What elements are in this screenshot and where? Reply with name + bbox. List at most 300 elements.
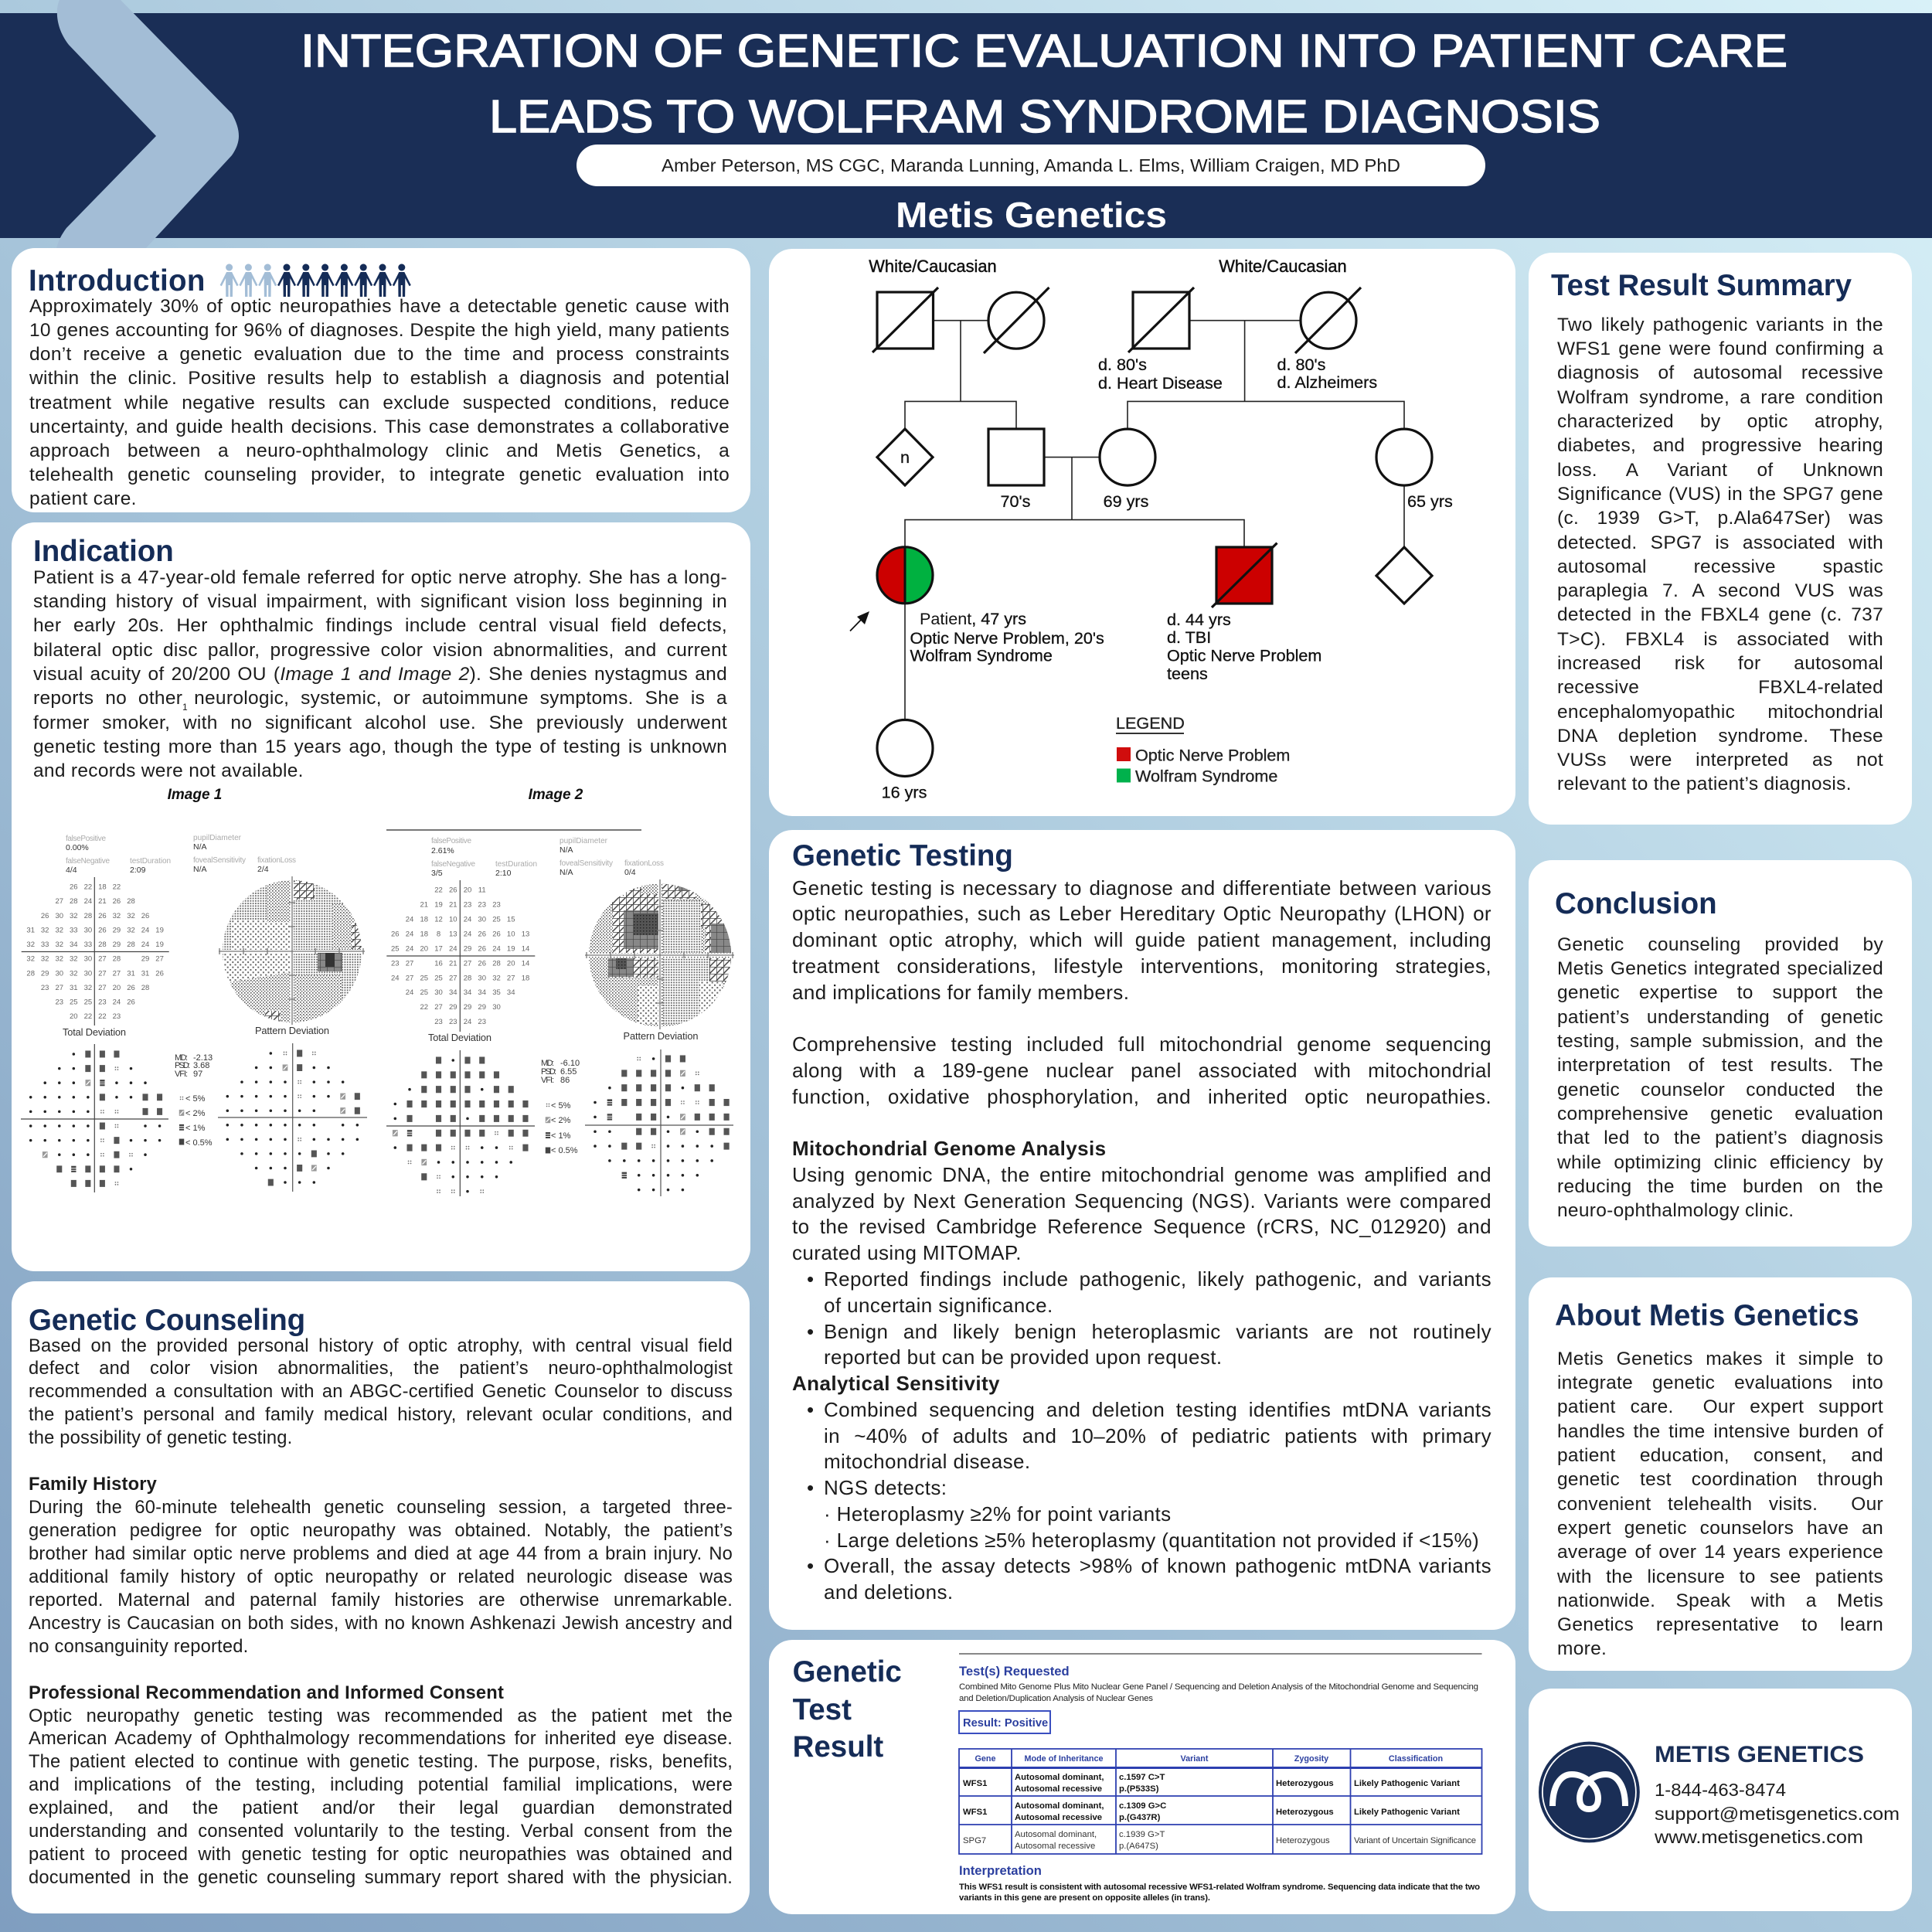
text: genetic testing body: · Heteroplasmy ≥2% for point variants xyxy=(824,1502,1172,1526)
text: test result summary body xyxy=(1557,315,1883,794)
result badge: Result: Positive xyxy=(963,1717,1048,1730)
text: genetic testing body: function, oxidative phosphorylation, and inherited optic neuropathies. xyxy=(792,1085,1492,1108)
text: genetic testing body: Mitochondrial Genome Analysis xyxy=(792,1137,1107,1160)
results table: p.(G437R) xyxy=(1119,1813,1161,1822)
image 2 test parameters: falsePositive xyxy=(431,837,471,845)
image 2 global indices and legend xyxy=(541,1059,580,1155)
image 2 sensitivity numbers: 20 xyxy=(507,959,515,968)
caption: image 2 total deviation: Total Deviation xyxy=(428,1032,492,1043)
results table: Likely Pathogenic Variant xyxy=(1354,1808,1460,1817)
image 2 sensitivity numbers: 8 xyxy=(437,930,440,938)
text: genetic testing body: · Large deletions ≥5% heteroplasmy (quantitation not provided if <15%) xyxy=(824,1529,1479,1552)
image 2 sensitivity numbers: 23 xyxy=(478,1018,486,1026)
image 2 sensitivity numbers: 18 xyxy=(420,930,428,938)
image 2 sensitivity numbers: 23 xyxy=(492,901,501,909)
image 1 sensitivity numbers: 29 xyxy=(113,926,121,934)
image 1 global indices and legend: < 0.5% xyxy=(185,1138,213,1148)
interpretation xyxy=(959,1863,1480,1903)
image 1 global indices and legend: VFI: xyxy=(175,1070,188,1079)
image 2 sensitivity numbers: 24 xyxy=(464,930,471,938)
image 1 sensitivity numbers: 32 xyxy=(127,926,135,934)
caption: image 1 total deviation: Total Deviation xyxy=(63,1026,126,1038)
patient labels: Wolfram Syndrome xyxy=(910,646,1053,665)
text: indication body xyxy=(33,567,727,781)
heading: conclusion: Conclusion xyxy=(1555,887,1717,920)
text: genetic testing body: of uncertain significance. xyxy=(824,1294,1053,1317)
image 2 sensitivity numbers: 32 xyxy=(492,974,501,982)
image 2 sensitivity numbers: 16 xyxy=(434,959,443,968)
image 1 sensitivity numbers: 22 xyxy=(84,883,92,892)
image 1 sensitivity numbers: 26 xyxy=(113,897,121,906)
image 2 sensitivity numbers: 24 xyxy=(492,944,501,953)
ancestry labels xyxy=(869,257,1347,276)
image 2 sensitivity numbers: 29 xyxy=(449,1003,457,1012)
panel: genetic testing xyxy=(769,830,1515,1630)
image 2 sensitivity numbers: 30 xyxy=(478,915,486,923)
image 1 test parameters: 2:09 xyxy=(130,866,146,875)
text: test result summary body: encephalomyopathic mitochondrial xyxy=(1557,702,1883,723)
results table: Autosomal recessive xyxy=(1015,1784,1102,1794)
image 1 sensitivity numbers: 30 xyxy=(56,969,63,978)
results table: Autosomal recessive xyxy=(1015,1842,1095,1851)
text: about body: Metis Genetics makes it simple to xyxy=(1557,1349,1883,1369)
text: test result summary body: relevant to the patient’s diagnosis. xyxy=(1557,774,1852,794)
text: test result summary body: detected. SPG7 is associated with xyxy=(1557,532,1883,553)
image 1 global indices and legend: PSD: xyxy=(175,1061,190,1070)
text: genetic counseling body: the patient’s personal and family medical history, relevant ocular conditions, and xyxy=(29,1405,733,1425)
image 2 sensitivity numbers: 17 xyxy=(434,944,443,953)
heading: genetic test result: Test xyxy=(793,1693,852,1726)
image 2 sensitivity numbers: 25 xyxy=(434,974,443,982)
text: introduction body: uncertainty, and guide health decisions. This case demonstrates a collaborative xyxy=(29,417,730,437)
image 1 global indices and legend: MD: xyxy=(175,1053,188,1063)
text: genetic testing body: mitochondrial disease. xyxy=(824,1450,1031,1473)
maternal grandparent notes: d. Alzheimers xyxy=(1277,372,1377,392)
text: genetic counseling body: understanding and consented voluntarily to the testing. Verbal consent from the xyxy=(29,1821,733,1842)
results table: c.1597 C>T xyxy=(1119,1773,1165,1782)
image 1 test parameters: N/A xyxy=(193,865,207,874)
contact details xyxy=(1654,1780,1900,1847)
second generation symbols xyxy=(877,429,1432,485)
text: genetic counseling body: no consanguinity reported. xyxy=(29,1637,248,1657)
image 1 sensitivity numbers: 32 xyxy=(70,955,78,964)
report top rule xyxy=(959,1653,1482,1655)
text: introduction body: approach between a neuro-ophthalmology clinic and Metis Genetics, a xyxy=(29,440,730,461)
image 2 test parameters: fixationLoss xyxy=(624,859,664,868)
image 1 sensitivity numbers: 26 xyxy=(98,926,107,934)
tests requested: and Deletion/Duplication Analysis of Nuclear Genes xyxy=(959,1694,1153,1703)
text: test result summary body: Two likely pathogenic variants in the xyxy=(1557,315,1883,335)
image 1 sensitivity numbers: 32 xyxy=(70,912,78,920)
text: genetic testing body: treatment considerations, lifestyle interventions, monitoring strategies, xyxy=(792,954,1492,978)
image 1 sensitivity numbers: 28 xyxy=(98,940,107,949)
text: introduction body: don’t receive a genetic evaluation due to the time and process constraints xyxy=(29,344,730,365)
text: conclusion body: interpretation of test results. The xyxy=(1557,1055,1883,1076)
image 2 sensitivity numbers: 30 xyxy=(478,974,486,982)
image 2 sensitivity numbers: 10 xyxy=(507,930,515,938)
interpretation: Interpretation xyxy=(959,1863,1042,1878)
title xyxy=(301,26,1787,142)
contact details: 1-844-463-8474 xyxy=(1655,1780,1786,1800)
image 1 sensitivity numbers: 28 xyxy=(113,955,121,964)
image 2 sensitivity numbers: 24 xyxy=(464,915,471,923)
text: genetic counseling body: Family History xyxy=(29,1475,157,1495)
heading: genetic test result: Result xyxy=(793,1730,883,1764)
image 1 sensitivity numbers: 32 xyxy=(41,955,49,964)
image 2 test parameters: 2.61% xyxy=(431,846,454,855)
image 1 sensitivity numbers: 32 xyxy=(56,955,63,964)
heading: genetic test result: Genetic xyxy=(793,1655,902,1689)
image 1 sensitivity numbers: 23 xyxy=(98,998,107,1006)
chart: family pedigree xyxy=(849,257,1453,802)
image 2 sensitivity numbers: 24 xyxy=(406,930,413,938)
text: genetic counseling body: Optic neuropathy genetic testing was recommended as the patient met the xyxy=(29,1706,733,1726)
authors pill xyxy=(577,145,1485,186)
patient labels: Optic Nerve Problem, 20's xyxy=(910,628,1104,648)
text: test result summary body: characterized by optic atrophy, xyxy=(1557,411,1883,432)
image 1 sensitivity numbers: 31 xyxy=(70,984,78,992)
interpretation: This WFS1 result is consistent with autosomal recessive WFS1-related Wolfram syndrome. Sequencing data indicate that the two xyxy=(959,1883,1480,1892)
image 1 global indices and legend: < 1% xyxy=(185,1124,206,1133)
text: genetic testing body: in ~40% of adults and 10–20% of pediatric patients with primary xyxy=(824,1424,1492,1447)
image 1 global indices and legend: < 5% xyxy=(185,1094,206,1104)
image 1 sensitivity numbers: 24 xyxy=(141,940,149,949)
image 2 sensitivity numbers: 15 xyxy=(507,915,515,923)
text: genetic counseling body: reported. Maternal and paternal family histories are otherwise unremarkable. xyxy=(29,1590,733,1611)
organization name: Metis Genetics xyxy=(896,195,1167,235)
text: genetic testing body: to the revised Cambridge Reference Sequence (rCRS, NC_012920) and xyxy=(792,1215,1492,1238)
image 2 sensitivity numbers: 26 xyxy=(478,959,486,968)
image 2 test parameters: fovealSensitivity xyxy=(560,859,613,868)
image 1 sensitivity numbers: 26 xyxy=(127,998,135,1006)
image 2 sensitivity numbers: 29 xyxy=(478,1003,486,1012)
text: test result summary body: detected in the FBXL4 gene (c. 737 xyxy=(1557,604,1883,625)
second generation labels xyxy=(900,447,1453,511)
image 2 sensitivity numbers: 29 xyxy=(464,944,471,953)
image 1 sensitivity numbers: 32 xyxy=(26,955,35,964)
image 1 global indices and legend xyxy=(175,1053,213,1148)
results table: Variant of Uncertain Significance xyxy=(1354,1836,1476,1845)
maternal grandparent notes xyxy=(1098,355,1377,393)
panel: genetic counseling xyxy=(12,1281,750,1913)
image 1 sensitivity numbers: 26 xyxy=(41,912,49,920)
text: indication body: her early 20s. Her ophthalmic findings include central visual field defects, xyxy=(33,615,727,636)
text: indication body: genetic testing more than 15 years ago, though the type of testing is unknown xyxy=(33,736,727,757)
legend xyxy=(1116,713,1290,786)
tests requested: Combined Mito Genome Plus Mito Nuclear Gene Panel / Sequencing and Deletion Analysis of the Mitochondrial Genome and Sequencing xyxy=(959,1682,1478,1692)
image 2 sensitivity numbers: 23 xyxy=(434,1018,443,1026)
panel: indication xyxy=(12,522,750,1271)
text: about body: more. xyxy=(1557,1638,1607,1659)
patient symbol xyxy=(877,547,933,604)
title: LEADS TO WOLFRAM SYNDROME DIAGNOSIS xyxy=(489,91,1600,142)
image 1 sensitivity numbers: 32 xyxy=(41,926,49,934)
second generation labels: 65 yrs xyxy=(1407,492,1453,511)
image 1 sensitivity numbers: 30 xyxy=(84,969,92,978)
pedigree connecting lines xyxy=(905,321,1404,719)
image 2 sensitivity numbers: 21 xyxy=(449,901,457,909)
image 1 sensitivity numbers: 30 xyxy=(56,912,63,920)
text: genetic testing body: Reported findings include pathogenic, likely pathogenic, and variants xyxy=(824,1267,1492,1291)
image 2 global indices and legend: < 2% xyxy=(551,1116,571,1125)
image 2 global indices and legend: < 1% xyxy=(551,1131,571,1141)
image 2 sensitivity numbers: 34 xyxy=(478,988,486,997)
footnote mark: 1 xyxy=(182,702,188,713)
image 2 total deviation probability plot xyxy=(386,1050,535,1196)
brother labels: d. 44 yrs xyxy=(1167,610,1231,629)
image 1 sensitivity numbers: 22 xyxy=(84,1012,92,1021)
heading: about metis genetics: About Metis Genetics xyxy=(1555,1298,1859,1332)
contact name: METIS GENETICS xyxy=(1655,1742,1864,1767)
second generation labels: n xyxy=(900,447,910,467)
panel: genetic test result xyxy=(769,1640,1515,1914)
maternal grandparent notes: d. Heart Disease xyxy=(1098,373,1223,393)
results table: p.(P533S) xyxy=(1119,1784,1159,1794)
brother labels: Optic Nerve Problem xyxy=(1167,646,1321,665)
image 1 sensitivity numbers: 32 xyxy=(70,969,78,978)
text: genetic testing body: • xyxy=(807,1267,815,1291)
legend: LEGEND xyxy=(1116,713,1185,733)
text: genetic testing body: dominant optic atrophy, which will guide patient management, including xyxy=(792,928,1492,951)
text: about body: genetic test coordination through xyxy=(1557,1469,1883,1490)
text: indication body: visual acuity of 20/200 OU (Image 1 and Image 2). She denies nystagmus and xyxy=(33,664,727,685)
maternal grandparent notes: d. 80's xyxy=(1277,355,1326,374)
text: conclusion body: testing, sample submission, and the xyxy=(1557,1031,1883,1052)
paternal grandparents xyxy=(872,287,1049,353)
image 2 sensitivity numbers: 21 xyxy=(449,959,457,968)
panel: test result summary xyxy=(1529,253,1912,825)
text: genetic testing body: Overall, the assay detects >98% of known pathogenic mtDNA variants xyxy=(824,1554,1492,1577)
panel: conclusion xyxy=(1529,860,1912,1247)
image 2 sensitivity numbers: 27 xyxy=(406,959,413,968)
image 2 pattern deviation grayscale disc xyxy=(585,879,734,1029)
image 2 sensitivity numbers: 21 xyxy=(420,901,428,909)
heading: introduction: Introduction xyxy=(29,264,206,297)
text: about body: with the licensure to see patients xyxy=(1557,1566,1883,1587)
image 2 sensitivity numbers: 25 xyxy=(420,988,428,997)
text: about body: convenient telehealth visits. Our xyxy=(1557,1494,1883,1515)
text: about body: average of over 14 years experience xyxy=(1557,1542,1883,1563)
text: genetic testing body: Analytical Sensitivity xyxy=(792,1372,1000,1395)
image 1 sensitivity numbers: 31 xyxy=(127,969,135,978)
results table: Heterozygous xyxy=(1276,1808,1334,1817)
text: about body: patient education, consent, and xyxy=(1557,1445,1883,1466)
image 2 top rule xyxy=(386,829,641,831)
heading: indication: Indication xyxy=(33,535,174,567)
text: genetic counseling body: documented in the genetic counseling summary report shared with the physician. xyxy=(29,1868,733,1888)
image 2 sensitivity numbers: 24 xyxy=(449,944,457,953)
results table: Zygosity xyxy=(1294,1754,1328,1764)
panel: introduction xyxy=(12,248,750,512)
image 2 sensitivity numbers: 27 xyxy=(507,974,515,982)
image 1 test parameters: 4/4 xyxy=(66,866,77,875)
image 1 sensitivity numbers: 30 xyxy=(84,955,92,964)
text: about body: Genetics representative to learn xyxy=(1557,1614,1883,1635)
icon: row of ten people xyxy=(219,264,411,297)
text: conclusion body: reducing the time burden on the xyxy=(1557,1176,1883,1197)
image 2 sensitivity numbers: 34 xyxy=(449,988,457,997)
image 2 sensitivity numbers: 20 xyxy=(420,944,428,953)
text: genetic testing body: • xyxy=(807,1320,815,1343)
heading: genetic testing: Genetic Testing xyxy=(792,839,1013,872)
brother labels: teens xyxy=(1167,664,1208,683)
text: test result summary body: diabetes, and progressive hearing xyxy=(1557,435,1883,456)
text: genetic testing body xyxy=(792,876,1492,1604)
text: indication body: bilateral optic disc pallor, progressive color vision abnormalities, and current xyxy=(33,640,727,661)
text: genetic counseling body: During the 60-minute telehealth genetic counseling session, a targeted three- xyxy=(29,1498,733,1518)
image 2 sensitivity numbers: 27 xyxy=(434,1003,443,1012)
text: genetic testing body: along with a 189-gene nuclear panel associated with mitochondrial xyxy=(792,1059,1492,1082)
image 1 sensitivity numbers: 29 xyxy=(141,955,149,964)
heading: genetic test result xyxy=(793,1655,902,1764)
results table: Heterozygous xyxy=(1276,1836,1330,1845)
text: genetic testing body: reported but can be provided upon request. xyxy=(824,1345,1222,1369)
image 1 sensitivity numbers: 26 xyxy=(155,969,164,978)
interpretation: variants in this gene are present on opposite alleles (in trans). xyxy=(959,1893,1210,1903)
title: INTEGRATION OF GENETIC EVALUATION INTO PATIENT CARE xyxy=(301,26,1787,77)
text: introduction body: Approximately 30% of optic neuropathies have a detectable genetic cause with xyxy=(29,296,730,317)
image 1 sensitivity numbers: 19 xyxy=(155,926,164,934)
image 2 sensitivity numbers: 35 xyxy=(492,988,501,997)
tests requested: Test(s) Requested xyxy=(959,1664,1070,1679)
image 2 sensitivity numbers: 24 xyxy=(406,915,413,923)
image 1 test parameters: fixationLoss xyxy=(257,856,296,865)
image 1 global indices and legend: 3.68 xyxy=(193,1061,209,1070)
image 2 sensitivity numbers: 24 xyxy=(391,974,400,982)
text: indication body: reports no other neurologic, systemic, or autoimmune symptoms. She is a xyxy=(33,688,727,709)
image 2 sensitivity numbers: 18 xyxy=(420,915,428,923)
text: genetic testing body: and implications for family members. xyxy=(792,981,1129,1004)
header banner xyxy=(0,0,1932,248)
image 1 sensitivity numbers: 32 xyxy=(56,940,63,949)
image 2 test parameters xyxy=(431,837,664,878)
image 2 sensitivity numbers: 26 xyxy=(478,930,486,938)
ancestry labels: White/Caucasian xyxy=(1219,257,1347,276)
icon: metis logo xyxy=(1539,1742,1640,1842)
image 2 sensitivity numbers: 14 xyxy=(522,959,529,968)
image 2 sensitivity numbers: 27 xyxy=(406,974,413,982)
caption: image 2 pattern deviation: Pattern Deviation xyxy=(623,1030,699,1042)
image 2 sensitivity numbers: 13 xyxy=(449,930,457,938)
text: genetic testing body: and deletions. xyxy=(824,1580,954,1604)
image 1 sensitivity numbers: 31 xyxy=(141,969,149,978)
text: conclusion body: Metis Genetics integrated specialized xyxy=(1557,958,1883,979)
image 1 sensitivity numbers: 32 xyxy=(56,926,63,934)
heading: genetic counseling: Genetic Counseling xyxy=(29,1303,305,1337)
image 2 sensitivity numbers: 13 xyxy=(522,930,529,938)
text: test result summary body: Wolfram syndrome, a rare condition xyxy=(1557,387,1883,408)
image 1 total deviation probability plot xyxy=(21,1044,168,1192)
image 1 sensitivity numbers: 28 xyxy=(141,984,149,992)
panel: contact xyxy=(1529,1689,1912,1911)
text: conclusion body: comprehensive genetic evaluation xyxy=(1557,1104,1883,1124)
image 1 sensitivity numbers: 23 xyxy=(56,998,63,1006)
results table: p.(A647S) xyxy=(1119,1842,1158,1851)
chart group: visual field images xyxy=(21,788,734,1196)
image 1 sensitivity numbers: 26 xyxy=(98,912,107,920)
image 1 sensitivity numbers: 27 xyxy=(155,955,164,964)
image 2 global indices and legend: < 5% xyxy=(551,1101,571,1111)
image 2 sensitivity numbers: 30 xyxy=(434,988,443,997)
text: introduction body: patient care. xyxy=(29,488,137,509)
results table: Heterozygous xyxy=(1276,1779,1334,1788)
image 2 sensitivity numbers: 26 xyxy=(492,930,501,938)
text: genetic counseling body: Based on the provided personal history of optic atrophy, with central visual field xyxy=(29,1335,733,1355)
patient labels: Patient, 47 yrs xyxy=(920,609,1026,628)
text: introduction body: treatment while negative results can exclude suspected conditions, reduce xyxy=(29,393,730,413)
image 1 sensitivity numbers: 32 xyxy=(26,940,35,949)
text: introduction body: 10 genes accounting for 96% of diagnoses. Despite the high yield, many patients xyxy=(29,320,730,341)
image 1 sensitivity numbers: 33 xyxy=(70,926,78,934)
image 2 sensitivity numbers: 23 xyxy=(478,901,486,909)
text: about body xyxy=(1557,1349,1883,1659)
image 2 sensitivity numbers: 27 xyxy=(449,974,457,982)
results table xyxy=(959,1749,1482,1854)
results table: Variant xyxy=(1180,1754,1209,1764)
contact details: support@metisgenetics.com xyxy=(1655,1804,1900,1824)
contact details: www.metisgenetics.com xyxy=(1654,1827,1863,1847)
text: genetic counseling body: Professional Recommendation and Informed Consent xyxy=(29,1683,504,1703)
results table: Autosomal recessive xyxy=(1015,1813,1102,1822)
image 1 test parameters: fovealSensitivity xyxy=(193,856,246,865)
image 2 test parameters: N/A xyxy=(560,845,573,855)
image 2 test parameters: 2:10 xyxy=(495,869,512,878)
image 2 sensitivity numbers: 34 xyxy=(464,988,471,997)
text: indication body: Patient is a 47-year-old female referred for optic nerve atrophy. She has a long- xyxy=(33,567,727,588)
text: genetic counseling body: explained, and the patient and/or their legal guardian demonstrated xyxy=(29,1798,733,1818)
text: genetic testing body: Using genomic DNA, the entire mitochondrial genome was amplified and xyxy=(792,1163,1492,1186)
image 2 pattern deviation probability plot xyxy=(585,1049,733,1196)
text: test result summary body: WFS1 gene were found confirming a xyxy=(1557,338,1883,359)
text: genetic counseling body: Ancestry is Caucasian on both sides, with no known Ashkenazi Jewish ancestry and xyxy=(29,1614,733,1634)
image 1 sensitivity numbers: 28 xyxy=(127,897,135,906)
tests requested xyxy=(959,1664,1478,1703)
image 1 test parameters: falsePositive xyxy=(66,835,106,843)
image 1 sensitivity numbers: 18 xyxy=(98,883,107,892)
image 1 sensitivity numbers: 23 xyxy=(113,1012,121,1021)
text: genetic testing body: curated using MITOMAP. xyxy=(792,1241,1022,1264)
text: conclusion body xyxy=(1557,934,1883,1221)
brother labels xyxy=(1167,610,1321,683)
image 2 sensitivity numbers: 22 xyxy=(434,886,443,895)
image 1 sensitivity numbers: 32 xyxy=(127,912,135,920)
results table: Autosomal dominant, xyxy=(1015,1801,1104,1811)
image 1 pattern deviation probability plot xyxy=(218,1043,367,1192)
maternal grandparent notes: d. 80's xyxy=(1098,355,1147,374)
results table: WFS1 xyxy=(963,1808,987,1817)
panel: pedigree xyxy=(769,249,1515,816)
image 2 test parameters: pupilDiameter xyxy=(560,837,608,845)
image 2 global indices and legend: MD: xyxy=(541,1059,554,1068)
image 2 test parameters: N/A xyxy=(560,868,573,877)
image 1 sensitivity numbers: 25 xyxy=(84,998,92,1006)
text: genetic counseling body: brother had similar optic nerve problems and died at age 44 from a brain injury. No xyxy=(29,1544,733,1564)
text: genetic counseling body: recommended a consultation with an ABGC-certified Genetic Counselor to discuss xyxy=(29,1382,733,1402)
text: about body: integrate genetic evaluations into xyxy=(1557,1372,1883,1393)
image 2 sensitivity numbers: 24 xyxy=(464,1018,471,1026)
text: indication body: former smoker, with no significant alcohol use. She previously underwent xyxy=(33,713,727,733)
image 1 sensitivity numbers: 24 xyxy=(113,998,121,1006)
proband arrow xyxy=(850,617,864,631)
image 2 global indices and legend: VFI: xyxy=(541,1076,554,1085)
ancestry labels: White/Caucasian xyxy=(869,257,997,276)
image 2 sensitivity numbers: 24 xyxy=(406,944,413,953)
image 2 global indices and legend: PSD: xyxy=(541,1067,556,1077)
image 2 sensitivity numbers: 26 xyxy=(391,930,400,938)
image 1 sensitivity numbers: 27 xyxy=(98,984,107,992)
image 1 sensitivity numbers: 21 xyxy=(98,897,107,906)
text: genetic counseling body: generation pedigree for optic neuropathy was obtained. Notably, the patient’s xyxy=(29,1521,733,1541)
